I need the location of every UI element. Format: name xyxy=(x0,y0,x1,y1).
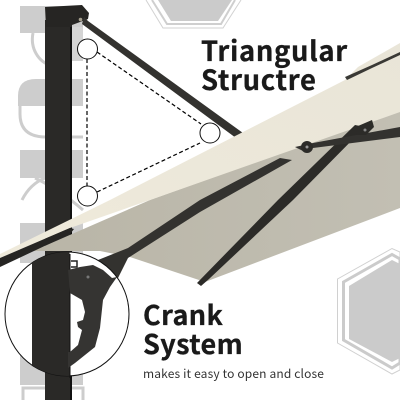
heading: crank system: Crank xyxy=(143,294,224,333)
left canopy rib xyxy=(0,228,74,267)
text: System xyxy=(143,323,243,362)
umbrella pole xyxy=(45,5,89,400)
crank detail circle xyxy=(5,250,129,380)
triangular support arm xyxy=(82,17,243,138)
heading: triangular structure: Triangular xyxy=(201,29,348,69)
circle marker top xyxy=(78,39,98,59)
secondary strut xyxy=(197,125,365,286)
cross bar and hinges xyxy=(295,120,400,153)
background watermark letters xyxy=(18,6,83,400)
triangle dashed outline xyxy=(87,52,201,192)
canopy top xyxy=(0,43,400,258)
crank handle xyxy=(68,265,117,368)
caption: makes it easy to open and close xyxy=(143,365,324,382)
circle marker right xyxy=(200,123,220,143)
canopy underside xyxy=(33,110,400,282)
main strut xyxy=(98,158,292,278)
text: Structre xyxy=(201,58,317,98)
circle marker bottom xyxy=(78,186,98,206)
canopy vent shadow xyxy=(345,52,400,80)
hexagon top xyxy=(146,0,241,28)
hexagon bottom right xyxy=(338,248,400,374)
